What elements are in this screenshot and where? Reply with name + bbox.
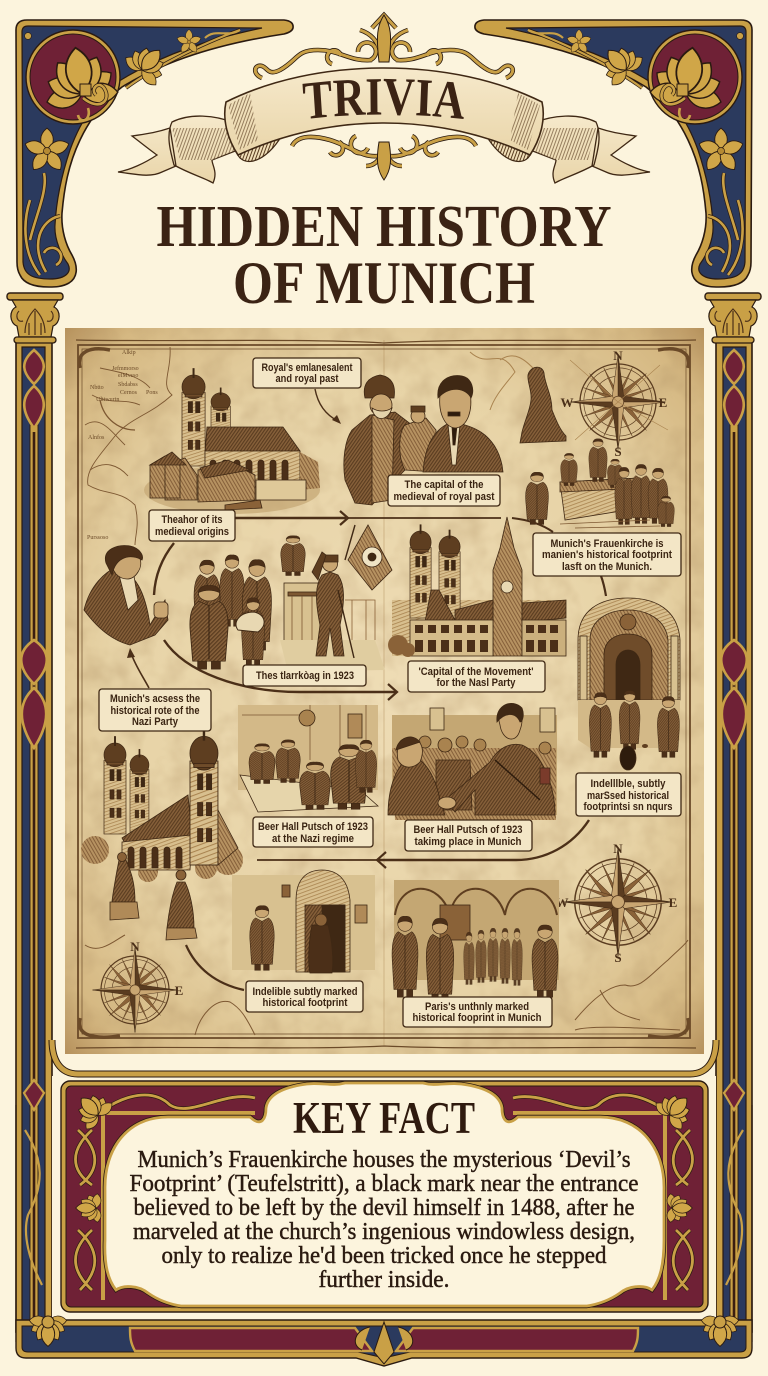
label 4: Munich's Frauenkirche is bbox=[550, 538, 664, 550]
handshake rally scene bbox=[388, 703, 557, 820]
compass rose top right bbox=[560, 348, 668, 459]
crowd group bbox=[190, 555, 271, 669]
compass rose middle right bbox=[556, 841, 677, 965]
parchment sheet bbox=[65, 328, 704, 1054]
label 3 bbox=[149, 510, 235, 541]
speaker with raised fist bbox=[84, 546, 168, 645]
key fact body text: believed to be left by the devil himself in 1488, after he bbox=[134, 1195, 634, 1221]
bottom corner flowers bbox=[29, 1315, 67, 1346]
map sketch lower right bbox=[575, 940, 688, 1030]
compass rose middle right: W bbox=[556, 895, 568, 910]
vaulted hall crowd scene bbox=[392, 880, 559, 1002]
label 12 bbox=[403, 997, 552, 1027]
compass rose top right: W bbox=[560, 395, 574, 410]
label 1: and royal past bbox=[276, 373, 339, 385]
label 6: 'Capital of the Movement' bbox=[418, 666, 534, 678]
arrow: speaker across to movement capital bbox=[164, 640, 397, 700]
trivia ribbon banner: TRIVIA bbox=[302, 78, 464, 119]
left ornamental column bbox=[7, 293, 63, 1342]
corner and side fan flowers bbox=[68, 1085, 116, 1133]
compass rose bottom left bbox=[92, 939, 183, 1032]
label 6: for the Nasl Party bbox=[436, 677, 516, 689]
compass rose top right: S bbox=[614, 444, 622, 459]
doorway scene bbox=[232, 870, 375, 973]
council table scene bbox=[526, 439, 674, 528]
label 10: footprintsi sn nqurs bbox=[584, 801, 672, 813]
map scribbles: Ulttwurtn bbox=[96, 397, 119, 403]
arrow: top callout to figures bbox=[315, 389, 338, 421]
compass rose middle right: N bbox=[613, 841, 623, 856]
Frauenkirche and town hall bbox=[388, 517, 566, 657]
arrow: party role up to speaker bbox=[131, 653, 149, 688]
map scribbles: Purssoso bbox=[87, 535, 108, 541]
label 3: Theahor of its bbox=[162, 514, 222, 526]
label 9 bbox=[405, 820, 532, 851]
lion monument bbox=[520, 367, 566, 443]
key fact body text: marveled at the church’s ingenious windowless design, bbox=[133, 1219, 635, 1245]
bottom ornamental band bbox=[16, 1315, 752, 1366]
vine scrollwork in band bbox=[76, 1095, 692, 1300]
map scribbles: Nbtto bbox=[90, 385, 104, 391]
left corner spandrel ornament bbox=[16, 20, 293, 287]
label 8: Beer Hall Putsch of 1923 bbox=[258, 821, 368, 833]
compass rose bottom left: E bbox=[175, 983, 183, 998]
label 11: Indelible subtly marked bbox=[252, 986, 358, 998]
label 7 bbox=[99, 689, 211, 731]
label 4 bbox=[533, 533, 681, 576]
beer hall meeting scene bbox=[238, 705, 378, 812]
label 10 bbox=[576, 773, 681, 816]
label 7: Munich's acsess the bbox=[110, 693, 200, 705]
ribbon main band bbox=[225, 68, 543, 155]
label 3: medieval origins bbox=[155, 526, 229, 538]
map scribbles: elMvsso bbox=[118, 373, 138, 379]
label 12: historical fooprint in Munich bbox=[412, 1012, 542, 1024]
label 11: historical footprint bbox=[262, 997, 348, 1009]
old map top left bbox=[85, 347, 172, 545]
gold scrollwork below banner bbox=[292, 136, 476, 180]
key fact body text: Footprint’ (Teufelstritt), a black mark near the entrance bbox=[130, 1171, 638, 1197]
key fact heading: KEY FACT bbox=[293, 1093, 475, 1143]
main title: OF MUNICH bbox=[233, 250, 535, 316]
map scribbles: Cernos bbox=[120, 390, 138, 396]
label 10: Indelllble, subtly bbox=[590, 778, 666, 790]
label 12: Paris's unthnly marked bbox=[425, 1001, 529, 1013]
map scribbles: Pons bbox=[146, 390, 158, 396]
label 9: takimg place in Munich bbox=[414, 836, 522, 848]
map scribbles: Sbdabss bbox=[118, 382, 138, 388]
map sketch top centre bbox=[470, 352, 535, 410]
map scribbles bbox=[87, 350, 158, 541]
right ornamental column bbox=[705, 293, 761, 1342]
label 9: Beer Hall Putsch of 1923 bbox=[414, 824, 522, 836]
compass rose bottom left: N bbox=[130, 939, 140, 954]
label 7: historical rote of the bbox=[110, 705, 200, 717]
ribbon right tail bbox=[530, 116, 650, 183]
soldier and flag bbox=[280, 525, 392, 672]
gold scrollwork above banner bbox=[255, 15, 513, 78]
key fact body text bbox=[130, 1147, 638, 1293]
label 11 bbox=[246, 981, 363, 1012]
label 2: The capital of the bbox=[404, 479, 484, 491]
parchment illustrated map panel bbox=[65, 328, 704, 1054]
key fact body text: only to realize he'd been tricked once he stepped bbox=[162, 1243, 606, 1269]
parchment inner border bbox=[76, 340, 696, 1048]
cream strip behind key panel bbox=[52, 1076, 716, 1320]
arrow: medieval origins path bbox=[235, 511, 606, 596]
main title: HIDDEN HISTORY bbox=[156, 193, 612, 259]
key fact body text: Munich’s Frauenkirche houses the mysterious ‘Devil’s bbox=[138, 1147, 630, 1173]
banner label TRIVIA bbox=[290, 114, 478, 119]
church illustration top left bbox=[144, 368, 320, 514]
arrow: statue to footprint label bbox=[186, 945, 244, 990]
statues bbox=[110, 852, 197, 940]
label 1: Royal's emlanesalent bbox=[262, 362, 353, 374]
ribbon left tail bbox=[118, 116, 238, 183]
figures: medieval ruler and politician bbox=[344, 375, 503, 505]
cathedral portal with devil's footprint bbox=[578, 598, 680, 770]
labels bbox=[99, 358, 681, 1027]
label 8 bbox=[253, 817, 373, 847]
label 7: Nazi Party bbox=[132, 716, 179, 728]
arrow: origins down to speaker bbox=[154, 543, 174, 595]
key fact body text: further inside. bbox=[318, 1267, 450, 1293]
compass rose top right: E bbox=[659, 395, 667, 410]
arrow: footprint back through beer hall bbox=[257, 820, 589, 868]
compass rose top right: N bbox=[613, 348, 623, 363]
label 2 bbox=[388, 475, 500, 506]
map scribbles: Alnfos bbox=[88, 434, 105, 441]
label 1 bbox=[253, 358, 361, 388]
label 10: marSsed historical bbox=[587, 790, 669, 802]
label 4: lasft on the Munich. bbox=[562, 561, 652, 573]
label 2: medieval of royal past bbox=[394, 491, 495, 503]
label 4: manien's historical footprint bbox=[542, 549, 672, 561]
maroon ornamental band bbox=[61, 1081, 708, 1312]
right corner spandrel ornament bbox=[475, 20, 752, 287]
cream text plaque bbox=[105, 1083, 664, 1306]
label 8: at the Nazi regime bbox=[272, 833, 354, 845]
map scribbles: Jefmmorso bbox=[112, 365, 139, 372]
map sketch bottom left bbox=[85, 935, 255, 1035]
ribbon curls bbox=[236, 130, 532, 161]
trivia ribbon banner bbox=[118, 12, 650, 184]
main title bbox=[156, 193, 612, 316]
officer portrait bbox=[281, 536, 305, 576]
second church lower left bbox=[81, 727, 243, 882]
map scribbles: Alkip bbox=[122, 350, 136, 356]
key fact panel bbox=[52, 1040, 716, 1320]
compass rose middle right: S bbox=[614, 950, 622, 965]
label 5 bbox=[243, 665, 366, 686]
gold frame rail under map bbox=[52, 1040, 716, 1074]
compass rose middle right: E bbox=[669, 895, 677, 910]
label 6 bbox=[408, 661, 545, 692]
label 5: Thes tlarrkòag in 1923 bbox=[256, 670, 354, 682]
